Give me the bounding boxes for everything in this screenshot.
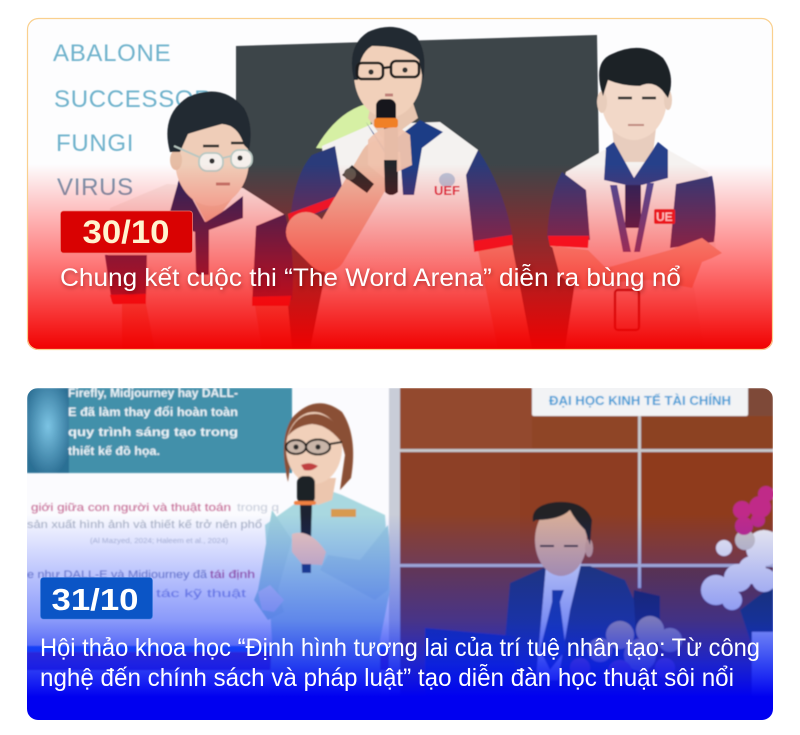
- date badge 31/10: 31/10: [52, 582, 138, 617]
- photo: scientific seminar speakers: E đã làm thay đổi hoàn toàn: [68, 407, 238, 419]
- photo: scientific seminar speakers: e như DALL-E và Midjourney đã: [27, 569, 208, 581]
- headline 31/10: nghệ đến chính sách và pháp luật” tạo diễn đàn học thuật sôi nổi: [40, 663, 734, 692]
- photo: scientific seminar speakers: (Al Mazyed, 2024; Haleem et al., 2024): [90, 538, 228, 545]
- headline 31/10: Hội thảo khoa học “Định hình tương lai của trí tuệ nhân tạo: Từ công: [40, 634, 760, 662]
- photo: three students on stage: FUNGI: [56, 130, 134, 157]
- table flowers: [588, 616, 682, 671]
- center student: UEF: [434, 183, 460, 198]
- headline 30/10: Chung kết cuộc thi “The Word Arena” diễn ra bùng nổ: [60, 263, 681, 292]
- orchids: [740, 588, 773, 640]
- photo: three students on stage: SUCCESSOR: [54, 86, 212, 113]
- wall sign: [532, 384, 748, 416]
- photo: scientific seminar speakers: quy trình sáng tạo trong: [68, 427, 238, 439]
- headline 31/10: [40, 634, 760, 692]
- date badge 30/10: [60, 211, 192, 253]
- card border: [28, 18, 772, 350]
- photo: three students on stage: ABALONE: [53, 40, 171, 67]
- right student: UE: [656, 210, 673, 224]
- photo: scientific seminar speakers: sản xuất hình ảnh và thiết kế trở nên phổ: [27, 519, 262, 531]
- wood wall: [389, 388, 401, 720]
- photo: scientific seminar speakers: giới giữa con người và thuật toán: [31, 502, 231, 514]
- woman speaker: [254, 402, 390, 679]
- photo: scientific seminar speakers: ĐẠI HỌC KINH TẾ TÀI CHÍNH: [549, 393, 731, 408]
- photo: scientific seminar speakers: [27, 384, 782, 722]
- photo: scientific seminar speakers: tái định: [210, 569, 255, 581]
- photo: three students on stage: VIRUS: [57, 174, 134, 201]
- center student: [288, 27, 532, 350]
- panel: event 30/10: [27, 18, 773, 350]
- photo: scientific seminar speakers: Firefly, Midjourney hay DALL-: [68, 388, 238, 400]
- right student: [547, 48, 722, 350]
- photo: scientific seminar speakers: tác kỹ thuật: [156, 588, 246, 600]
- photo: scientific seminar speakers: thiết kế đồ họa.: [68, 446, 160, 458]
- seated man: [505, 565, 637, 680]
- left student: [105, 92, 293, 350]
- photo: scientific seminar speakers: trong q: [237, 502, 279, 514]
- panel: event 31/10: [27, 384, 782, 722]
- date badge 31/10: [40, 578, 152, 619]
- date badge 30/10: 30/10: [82, 214, 170, 250]
- photo: three students on stage: [27, 18, 773, 350]
